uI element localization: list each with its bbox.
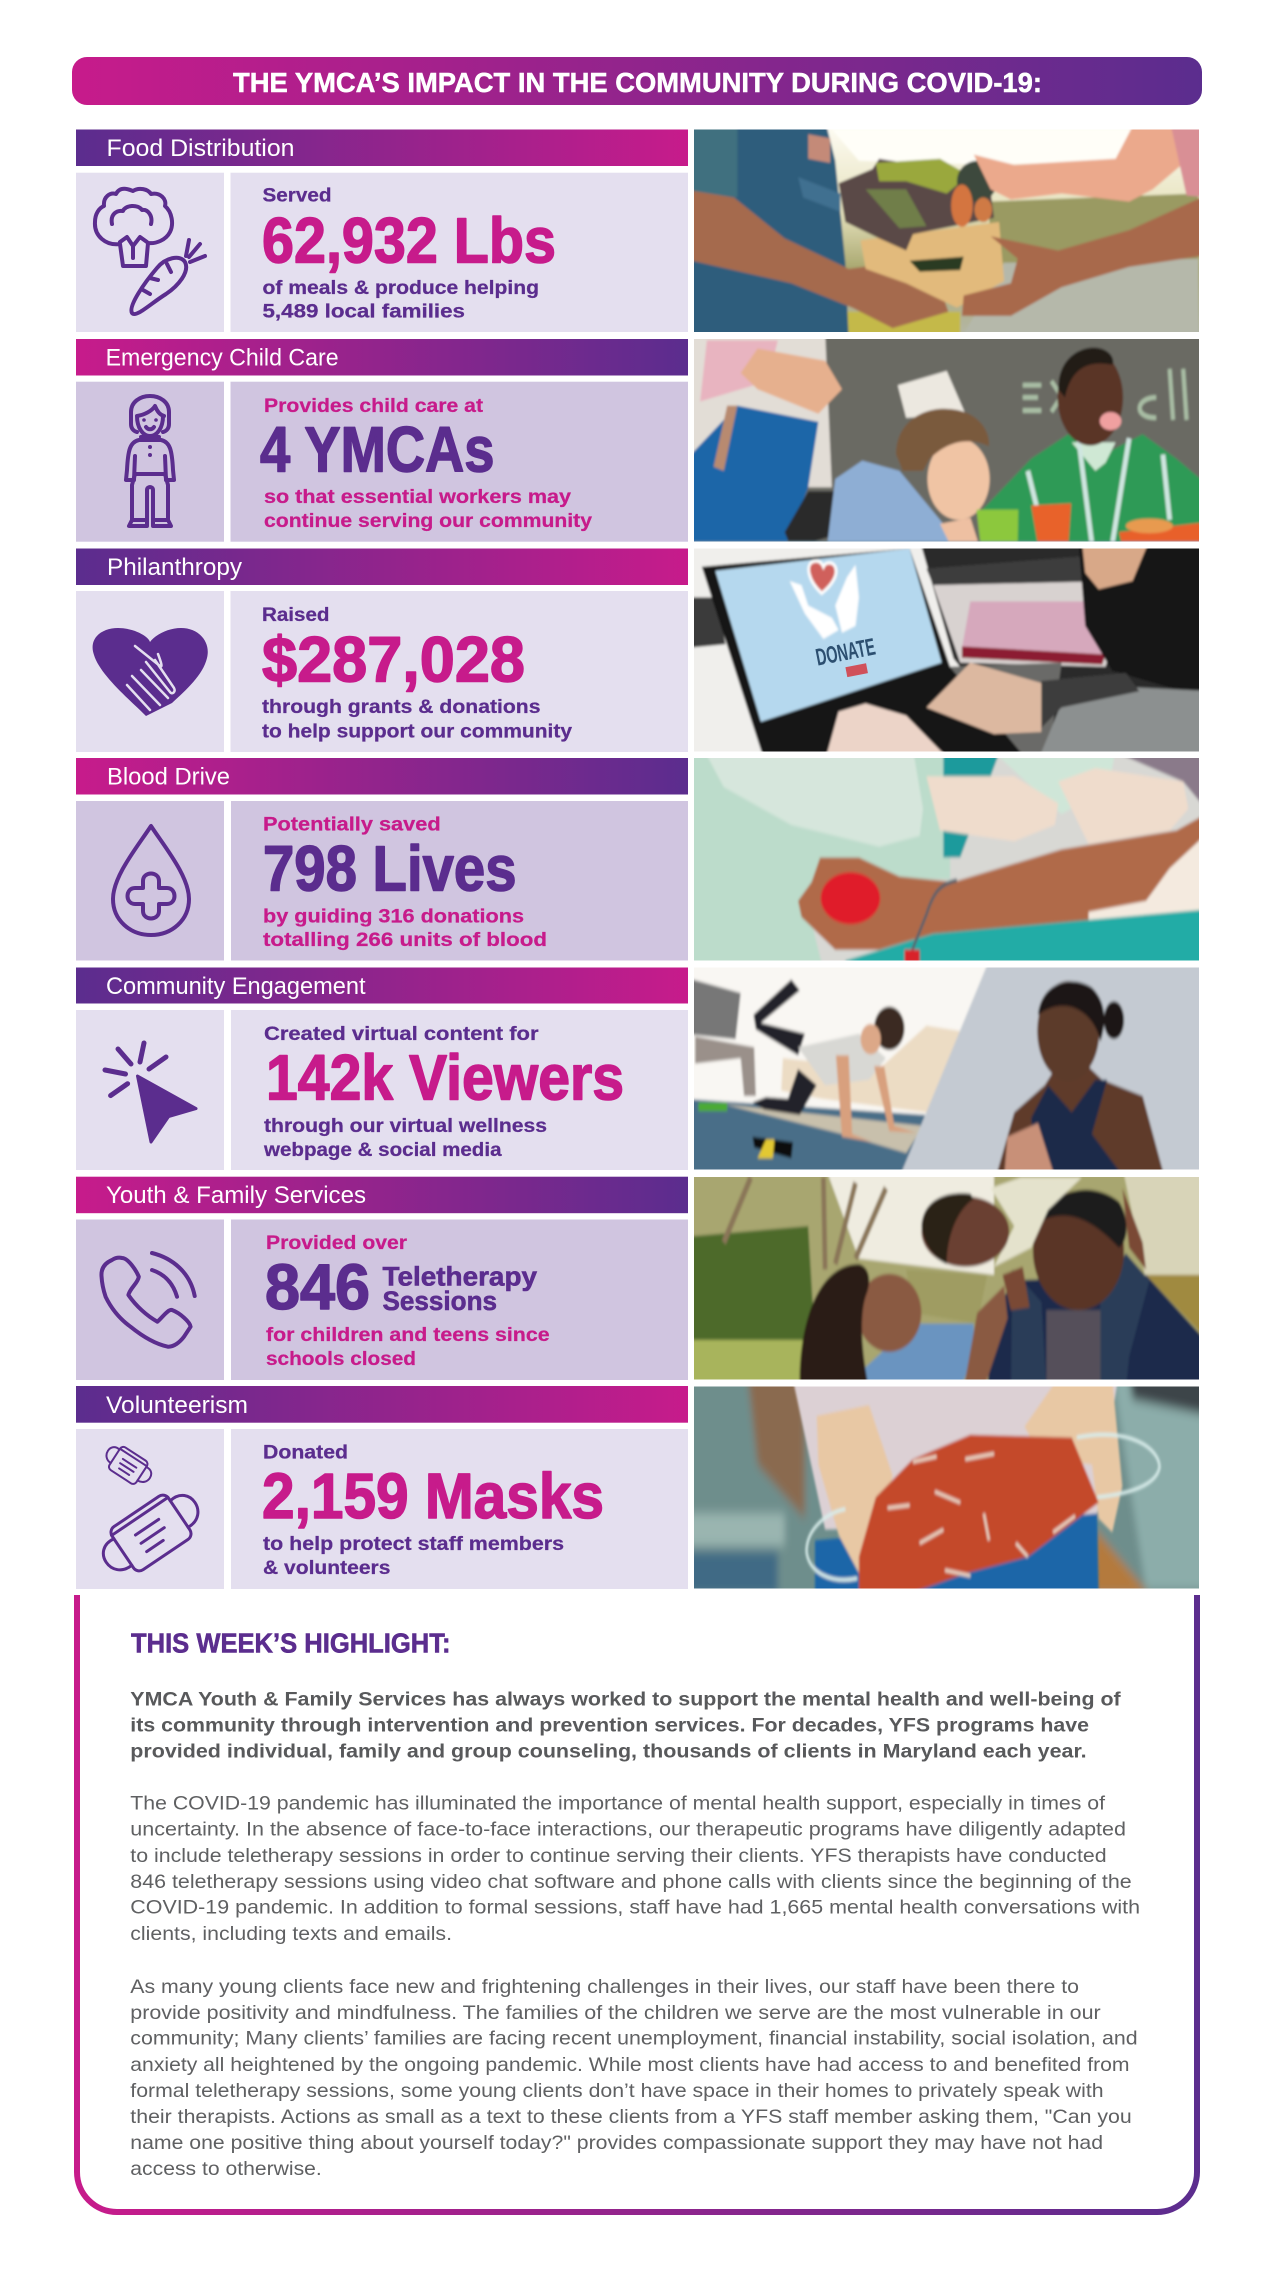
text block: intro: YMCA Youth & Family Services has always worked to support the mental health and well-being of — [130, 1688, 1121, 1710]
stat panel: blood drive: totalling 266 units of blood — [263, 930, 547, 951]
heading: youth and family services — [76, 1177, 688, 1213]
heading: youth and family services: Youth & Family Services — [106, 1182, 366, 1209]
stat panel: food distribution — [230, 173, 688, 332]
heading: volunteerism: Volunteerism — [106, 1392, 248, 1419]
text block: young clients paragraph: provide positivity and mindfulness. The families of the children we serve are the most vulnerable in our — [130, 2002, 1101, 2024]
screen label: donate: DONATE — [814, 634, 878, 671]
stat panel: volunteerism: & volunteers — [263, 1558, 390, 1579]
heading: this week's highlight: THIS WEEK’S HIGHLIGHT: — [131, 1628, 450, 1658]
heading: food distribution: Food Distribution — [106, 135, 294, 162]
stat panel: philanthropy: Raised — [262, 605, 330, 626]
photo: virtual wellness exercise — [694, 968, 1199, 1170]
stat panel: community engagement — [231, 1010, 688, 1170]
photo: family laughing outdoors — [694, 1177, 1199, 1380]
panel: philanthropy — [76, 540, 1210, 761]
panel: community engagement — [76, 961, 1210, 1177]
text block: young clients paragraph — [130, 1976, 1138, 2180]
stat panel: volunteerism — [231, 1429, 688, 1589]
text block: teletherapy paragraph: 846 teletherapy sessions using video chat software and phone calls with clients since the beginning of the — [130, 1871, 1132, 1893]
text block: teletherapy paragraph: clients, including texts and emails. — [130, 1923, 452, 1945]
photo: children at a table — [694, 339, 1199, 542]
stat panel: youth and family services — [231, 1220, 688, 1380]
stat panel: food distribution: 62,932 Lbs — [262, 205, 556, 277]
photo: laptop showing donate screen — [694, 548, 1199, 752]
stat panel: community engagement: through our virtual wellness — [264, 1116, 547, 1137]
stat panel: philanthropy — [230, 591, 688, 752]
heading: emergency child care: Emergency Child Care — [106, 345, 339, 372]
text block: young clients paragraph: their therapists. Actions as small as a text to these clients from a YFS staff member asking them, "Can you — [130, 2106, 1132, 2128]
title banner — [72, 57, 1202, 105]
stat panel: blood drive: Potentially saved — [263, 815, 441, 836]
text block: intro: its community through intervention and prevention services. For decades, YFS programs have — [130, 1714, 1089, 1736]
stat panel: youth and family services: schools closed — [266, 1349, 416, 1370]
panel: emergency child care — [76, 332, 1210, 550]
panel: blood drive — [76, 758, 1199, 960]
stat panel: youth and family services: Teletherapy — [382, 1262, 537, 1292]
icon: phone call — [76, 1220, 224, 1380]
text block: intro: provided individual, family and group counseling, thousands of clients in Maryland each year. — [130, 1740, 1087, 1762]
icon: child — [76, 382, 224, 542]
stat panel: youth and family services: Sessions — [382, 1286, 497, 1316]
heading: blood drive: Blood Drive — [107, 764, 230, 790]
text block: teletherapy paragraph: to include teletherapy sessions in order to continue serving their clients. YFS therapists have conducted — [130, 1845, 1107, 1867]
stat panel: community engagement: Created virtual content for — [264, 1024, 539, 1045]
photo: hands holding cloth mask — [694, 1386, 1199, 1588]
photo: blood donation arm — [694, 758, 1199, 960]
icon: broccoli and carrot — [76, 173, 224, 332]
text block: young clients paragraph: name one positive thing about yourself today?" provides compassionate support they may have not had — [130, 2132, 1103, 2154]
heading: volunteerism — [76, 1386, 688, 1423]
stat panel: blood drive: by guiding 316 donations — [263, 906, 524, 928]
stat panel: philanthropy: through grants & donations — [262, 697, 540, 718]
stat panel: youth and family services: 846 — [265, 1251, 370, 1323]
heading: philanthropy — [76, 548, 688, 585]
stat panel: youth and family services: Provided over — [266, 1233, 408, 1254]
photo: hands passing a crate of produce — [694, 130, 1199, 332]
stat panel: volunteerism: 2,159 Masks — [262, 1460, 604, 1532]
stat panel: volunteerism: to help protect staff members — [263, 1534, 564, 1555]
stat panel: emergency child care: so that essential workers may — [264, 487, 571, 508]
text block: young clients paragraph: access to otherwise. — [130, 2158, 322, 2180]
text block: teletherapy paragraph — [130, 1793, 1140, 1945]
icon: blood drop with cross — [76, 801, 224, 960]
text block: intro — [130, 1688, 1121, 1762]
stat panel: community engagement: webpage & social media — [263, 1140, 502, 1161]
text block: young clients paragraph: formal teletherapy sessions, some young clients don’t have space in their homes to privately speak with — [130, 2080, 1104, 2102]
stat panel: food distribution: of meals & produce helping — [262, 278, 539, 299]
text block: teletherapy paragraph: uncertainty. In the absence of face-to-face interactions, our therapeutic programs have diligently adapted — [130, 1819, 1126, 1841]
heading: philanthropy: Philanthropy — [107, 554, 242, 581]
stat panel: community engagement: 142k Viewers — [266, 1042, 624, 1114]
text block: young clients paragraph: anxiety all heightened by the ongoing pandemic. While most clients have had access to and benefited from — [130, 2054, 1130, 2076]
stat panel: emergency child care — [230, 382, 688, 542]
text block: teletherapy paragraph: COVID-19 pandemic. In addition to formal sessions, staff have had 1,665 mental health conversations with — [130, 1897, 1140, 1919]
stat panel: emergency child care: Provides child care at — [264, 396, 484, 417]
stat panel: philanthropy: $287,028 — [262, 624, 525, 696]
stat panel: youth and family services: for children and teens since — [266, 1325, 550, 1346]
panel: this week's highlight — [77, 1595, 1197, 2212]
text block: teletherapy paragraph: The COVID-19 pandemic has illuminated the importance of mental health support, especially in times of — [130, 1793, 1106, 1815]
stat panel: food distribution: 5,489 local families — [262, 302, 465, 323]
icon: cursor click — [76, 1010, 224, 1170]
text block: young clients paragraph: As many young clients face new and frightening challenges in their lives, our staff have been there to — [130, 1976, 1079, 1998]
stat panel: emergency child care: continue serving our community — [264, 511, 592, 532]
stat panel: philanthropy: to help support our community — [262, 722, 572, 742]
stat panel: blood drive: 798 Lives — [263, 832, 516, 904]
heading: community engagement: Community Engagement — [106, 973, 366, 1000]
text block: young clients paragraph: community; Many clients’ families are facing recent unemployment, financial instability, social isolation, and — [130, 2028, 1138, 2050]
title banner: THE YMCA’S IMPACT IN THE COMMUNITY DURING COVID-19: — [233, 67, 1042, 98]
panel: volunteerism — [76, 1386, 1199, 1589]
icon part: small mask — [100, 1440, 157, 1490]
heading: blood drive — [76, 758, 688, 794]
heading: food distribution — [76, 130, 688, 166]
icon part: large mask — [92, 1482, 210, 1584]
icon: heart of clasped hands — [76, 591, 224, 752]
screen label: donate — [815, 638, 876, 678]
stat panel: food distribution: Served — [262, 186, 332, 207]
heading: emergency child care — [76, 339, 688, 376]
panel: food distribution — [76, 130, 1199, 332]
stat panel: emergency child care: 4 YMCAs — [260, 414, 494, 486]
stat panel: blood drive — [231, 801, 688, 960]
heading: community engagement — [76, 968, 688, 1004]
stat panel: volunteerism: Donated — [263, 1443, 348, 1464]
panel: youth and family services — [76, 1166, 1210, 1389]
icon: face masks — [76, 1429, 224, 1589]
